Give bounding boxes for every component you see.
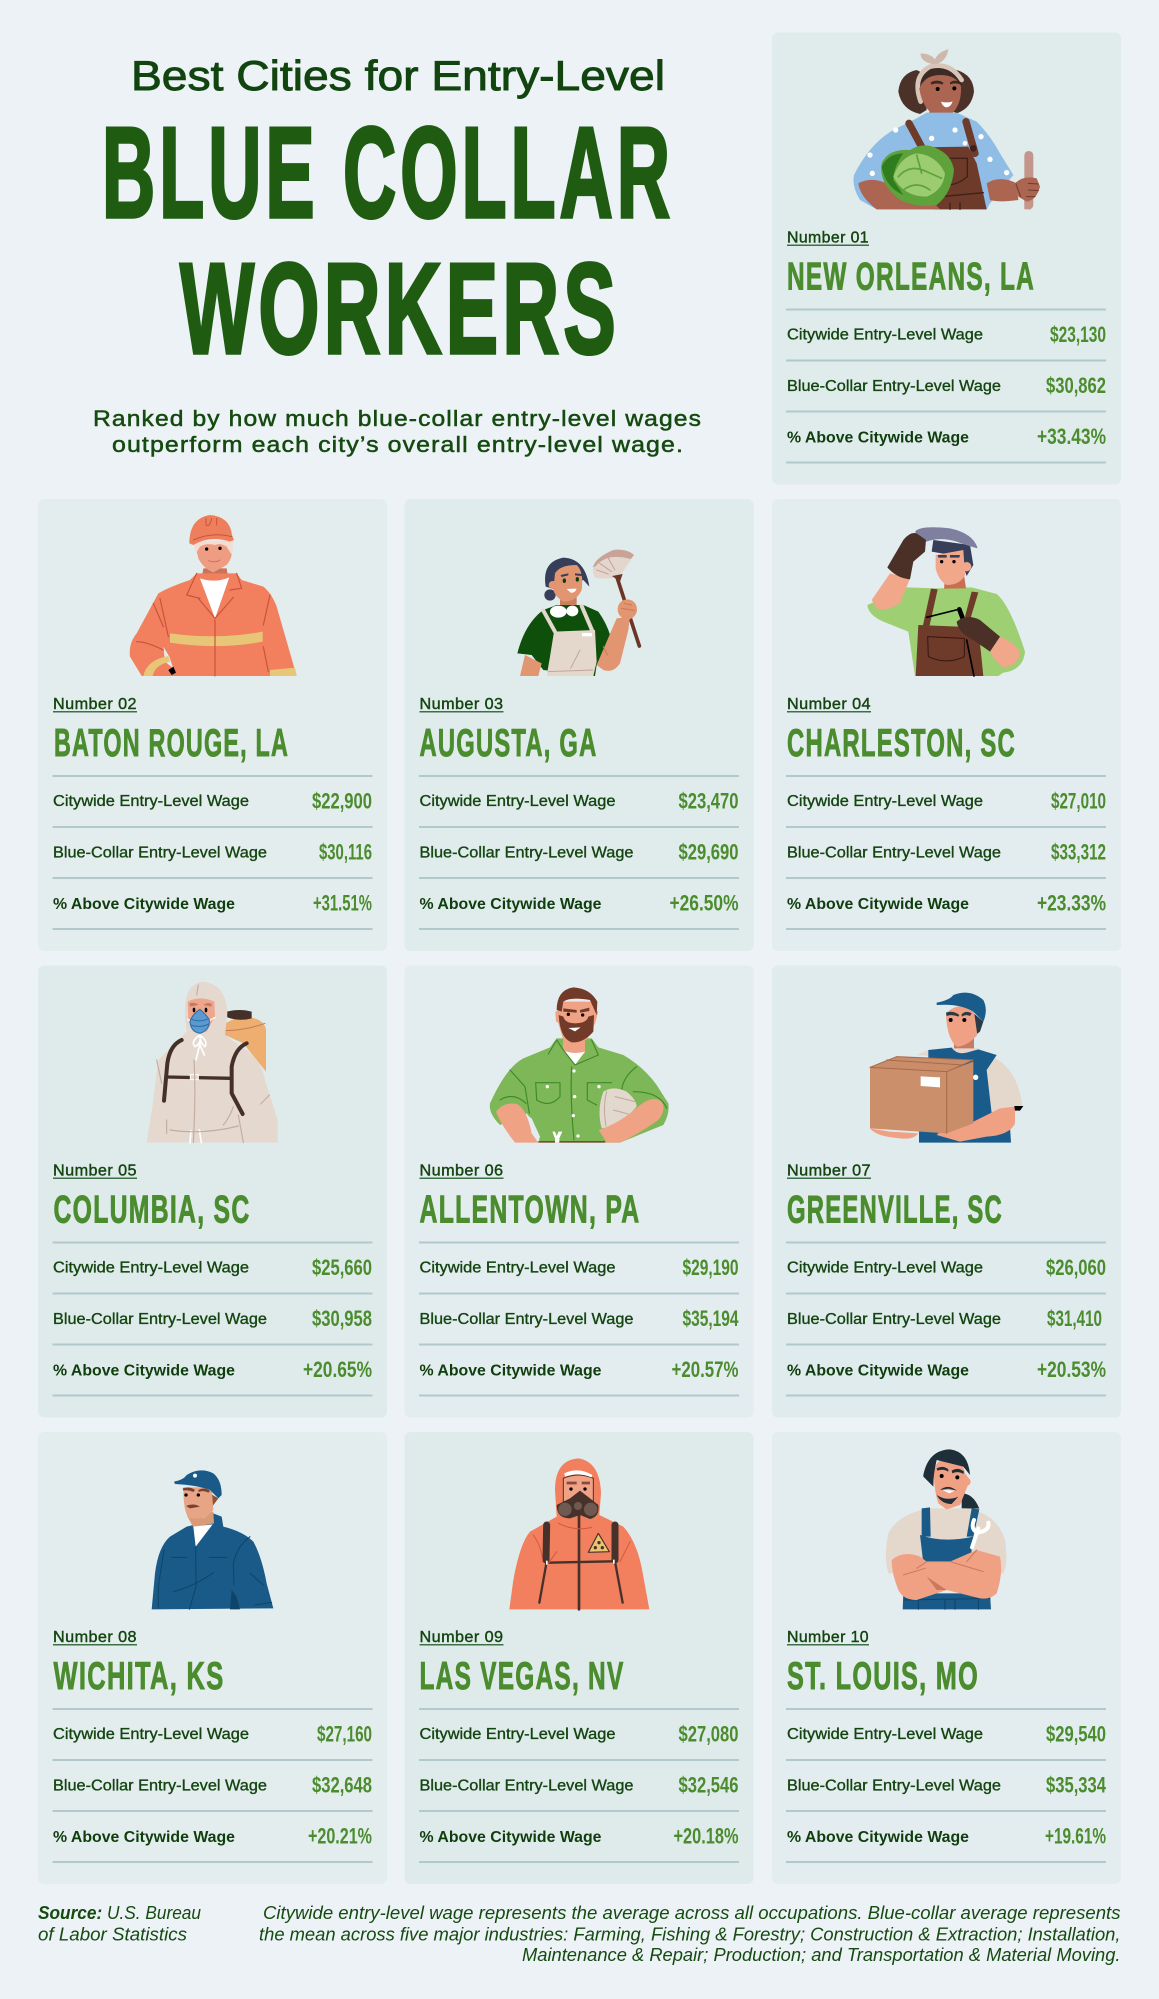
title: Best Cities for Entry-Level bbox=[131, 52, 665, 99]
city name: COLUMBIA, SC bbox=[54, 1188, 250, 1232]
row: blue-collar wage: Blue-Collar Entry-Level Wage bbox=[787, 378, 1001, 395]
row: blue-collar wage: Blue-Collar Entry-Level Wage bbox=[420, 844, 633, 862]
row: citywide wage bbox=[419, 775, 739, 814]
city name: AUGUSTA, GA bbox=[420, 722, 598, 765]
icon: hazmat worker with tank bbox=[147, 982, 278, 1143]
icon: mechanic in blue jacket bbox=[152, 1470, 273, 1609]
panel: Columbia bbox=[38, 966, 387, 1418]
row: blue-collar wage: $30,958 bbox=[312, 1306, 372, 1331]
row: blue-collar wage bbox=[52, 826, 372, 864]
row: percent above bbox=[419, 877, 739, 930]
source note bbox=[38, 1903, 201, 1944]
row: citywide wage: $26,060 bbox=[1046, 1255, 1106, 1280]
row: blue-collar wage: Blue-Collar Entry-Level Wage bbox=[53, 1311, 267, 1328]
methodology note bbox=[259, 1903, 1120, 1965]
row: percent above: % Above Citywide Wage bbox=[787, 896, 969, 913]
icon: delivery worker with box bbox=[870, 993, 1023, 1143]
row: citywide wage: $23,470 bbox=[678, 788, 738, 814]
panel: Augusta bbox=[404, 499, 754, 951]
row: percent above: +23.33% bbox=[1037, 890, 1106, 916]
city name: CHARLESTON, SC bbox=[787, 722, 1016, 765]
row: blue-collar wage: Blue-Collar Entry-Level Wage bbox=[53, 1778, 267, 1794]
row: percent above: +31.51% bbox=[313, 890, 372, 916]
row: blue-collar wage bbox=[786, 826, 1106, 864]
row: citywide wage bbox=[419, 1708, 739, 1746]
icon: cleaner with duster bbox=[517, 549, 639, 676]
row: citywide wage: Citywide Entry-Level Wage bbox=[787, 1726, 983, 1743]
row: citywide wage bbox=[786, 1708, 1106, 1746]
row: citywide wage: $27,160 bbox=[317, 1722, 372, 1746]
panel: Wichita bbox=[38, 1432, 387, 1884]
row: citywide wage bbox=[52, 1242, 372, 1280]
methodology note: the mean across five major industries: Farming, Fishing & Forestry; Construction & Extraction; Installation, bbox=[259, 1924, 1120, 1944]
city name: LAS VEGAS, NV bbox=[420, 1655, 624, 1698]
row: blue-collar wage: $33,312 bbox=[1051, 840, 1106, 864]
row: blue-collar wage bbox=[786, 360, 1106, 398]
row: blue-collar wage bbox=[786, 1292, 1106, 1331]
row: percent above: % Above Citywide Wage bbox=[787, 1362, 969, 1380]
row: blue-collar wage: $32,648 bbox=[312, 1772, 372, 1798]
row: percent above: +33.43% bbox=[1037, 424, 1106, 449]
row: citywide wage: $25,660 bbox=[312, 1255, 372, 1280]
row: percent above: % Above Citywide Wage bbox=[420, 896, 602, 913]
row: percent above bbox=[786, 877, 1106, 930]
row: percent above: % Above Citywide Wage bbox=[787, 1829, 969, 1846]
row: percent above: +20.18% bbox=[674, 1824, 738, 1848]
title: BLUE COLLAR bbox=[102, 101, 674, 245]
row: percent above: % Above Citywide Wage bbox=[53, 1829, 235, 1846]
row: blue-collar wage bbox=[786, 1759, 1106, 1798]
rank label: Number 02 bbox=[53, 696, 137, 713]
row: citywide wage bbox=[786, 308, 1106, 347]
row: percent above: +20.53% bbox=[1037, 1357, 1106, 1382]
rank label: Number 04 bbox=[787, 696, 871, 713]
row: percent above: +20.65% bbox=[303, 1357, 372, 1382]
row: citywide wage: Citywide Entry-Level Wage bbox=[787, 1260, 983, 1276]
source note: of Labor Statistics bbox=[38, 1924, 187, 1944]
row: citywide wage: Citywide Entry-Level Wage bbox=[53, 1260, 249, 1276]
row: citywide wage: $23,130 bbox=[1050, 322, 1106, 347]
row: citywide wage bbox=[786, 1242, 1106, 1280]
row: blue-collar wage bbox=[419, 1759, 739, 1798]
panel: Greenville bbox=[772, 966, 1121, 1418]
rank label: Number 10 bbox=[787, 1629, 869, 1646]
methodology note: Maintenance & Repair; Production; and Transportation & Material Moving. bbox=[522, 1945, 1120, 1965]
city name: ALLENTOWN, PA bbox=[420, 1188, 640, 1232]
row: blue-collar wage bbox=[419, 826, 739, 864]
row: percent above bbox=[52, 877, 372, 930]
row: blue-collar wage: $31,410 bbox=[1047, 1306, 1102, 1331]
row: blue-collar wage: Blue-Collar Entry-Level Wage bbox=[53, 844, 267, 862]
icon: mechanic with wrench and crossed arms bbox=[886, 1449, 1006, 1609]
row: blue-collar wage: Blue-Collar Entry-Level Wage bbox=[787, 1311, 1001, 1328]
row: percent above: +20.21% bbox=[308, 1824, 372, 1848]
panel: Allentown bbox=[404, 966, 754, 1418]
methodology note: Citywide entry-level wage represents the average across all occupations. Blue-collar average represents bbox=[263, 1903, 1120, 1923]
row: percent above: % Above Citywide Wage bbox=[420, 1829, 602, 1846]
row: percent above: % Above Citywide Wage bbox=[53, 896, 235, 913]
row: citywide wage: Citywide Entry-Level Wage bbox=[53, 1726, 249, 1743]
panel: Charleston bbox=[772, 499, 1121, 951]
panel: Las Vegas bbox=[404, 1432, 754, 1884]
row: citywide wage: Citywide Entry-Level Wage bbox=[420, 1726, 616, 1743]
row: blue-collar wage: Blue-Collar Entry-Level Wage bbox=[787, 844, 1001, 862]
row: percent above: +26.50% bbox=[670, 890, 738, 916]
rank label: Number 07 bbox=[787, 1162, 871, 1180]
title bbox=[102, 52, 674, 381]
row: percent above: +19.61% bbox=[1045, 1824, 1106, 1848]
row: citywide wage: Citywide Entry-Level Wage bbox=[53, 793, 249, 810]
panel: New Orleans bbox=[772, 32, 1121, 484]
source note: Source: U.S. Bureau bbox=[38, 1903, 201, 1923]
rank label: Number 01 bbox=[787, 230, 869, 246]
icon: farmer with cabbage bbox=[853, 49, 1040, 209]
row: citywide wage: Citywide Entry-Level Wage bbox=[787, 793, 983, 810]
icon: worker in green shirt holding helmet bbox=[490, 987, 669, 1143]
row: percent above bbox=[419, 1344, 739, 1396]
row: citywide wage: $29,540 bbox=[1046, 1722, 1106, 1746]
row: citywide wage: $27,080 bbox=[678, 1722, 738, 1746]
row: citywide wage: $29,190 bbox=[682, 1255, 738, 1280]
row: blue-collar wage: $29,690 bbox=[678, 840, 738, 864]
panel: Baton Rouge bbox=[38, 499, 387, 951]
row: blue-collar wage: Blue-Collar Entry-Level Wage bbox=[420, 1778, 633, 1794]
row: blue-collar wage: $35,194 bbox=[682, 1306, 739, 1331]
subtitle: Ranked by how much blue-collar entry-level wages bbox=[93, 406, 702, 431]
row: percent above bbox=[52, 1344, 372, 1396]
title: WORKERS bbox=[180, 237, 620, 381]
row: blue-collar wage bbox=[52, 1759, 372, 1798]
row: blue-collar wage: $32,546 bbox=[678, 1772, 738, 1798]
icon: worker in orange hazmat suit with gas mask bbox=[509, 1458, 649, 1609]
city name: GREENVILLE, SC bbox=[787, 1188, 1003, 1232]
row: citywide wage: Citywide Entry-Level Wage bbox=[787, 326, 983, 344]
subtitle bbox=[93, 406, 702, 457]
row: blue-collar wage bbox=[52, 1292, 372, 1331]
row: percent above: % Above Citywide Wage bbox=[787, 430, 969, 446]
row: blue-collar wage: Blue-Collar Entry-Level Wage bbox=[787, 1778, 1001, 1794]
row: blue-collar wage: $30,116 bbox=[319, 840, 372, 864]
row: blue-collar wage: $30,862 bbox=[1046, 373, 1106, 398]
row: percent above: % Above Citywide Wage bbox=[53, 1362, 235, 1380]
icon: firefighter bbox=[130, 515, 297, 676]
row: blue-collar wage: $35,334 bbox=[1046, 1772, 1106, 1798]
row: percent above bbox=[786, 1344, 1106, 1396]
row: citywide wage bbox=[786, 775, 1106, 814]
rank label: Number 08 bbox=[53, 1629, 137, 1646]
row: percent above bbox=[52, 1810, 372, 1863]
city name: ST. LOUIS, MO bbox=[787, 1655, 979, 1698]
rank label: Number 05 bbox=[53, 1162, 137, 1180]
city name: WICHITA, KS bbox=[54, 1655, 224, 1698]
subtitle: outperform each city’s overall entry-level wage. bbox=[112, 432, 684, 457]
row: percent above: % Above Citywide Wage bbox=[420, 1362, 602, 1380]
city name: BATON ROUGE, LA bbox=[54, 722, 289, 765]
row: citywide wage bbox=[52, 775, 372, 814]
row: citywide wage: $22,900 bbox=[312, 788, 372, 814]
panel: St. Louis bbox=[772, 1432, 1121, 1884]
row: citywide wage: $27,010 bbox=[1051, 788, 1106, 814]
row: blue-collar wage: Blue-Collar Entry-Level Wage bbox=[420, 1311, 633, 1328]
row: percent above bbox=[786, 1810, 1106, 1863]
rank label: Number 09 bbox=[420, 1629, 504, 1646]
row: percent above bbox=[786, 410, 1106, 464]
row: percent above: +20.57% bbox=[672, 1357, 738, 1382]
row: percent above bbox=[419, 1810, 739, 1863]
rank label: Number 06 bbox=[420, 1162, 504, 1180]
row: citywide wage: Citywide Entry-Level Wage bbox=[420, 793, 616, 810]
row: blue-collar wage bbox=[419, 1292, 739, 1331]
row: citywide wage bbox=[52, 1708, 372, 1746]
rank label: Number 03 bbox=[420, 696, 504, 713]
icon: welder bbox=[867, 527, 1025, 676]
row: citywide wage: Citywide Entry-Level Wage bbox=[420, 1260, 616, 1276]
row: citywide wage bbox=[419, 1242, 739, 1280]
